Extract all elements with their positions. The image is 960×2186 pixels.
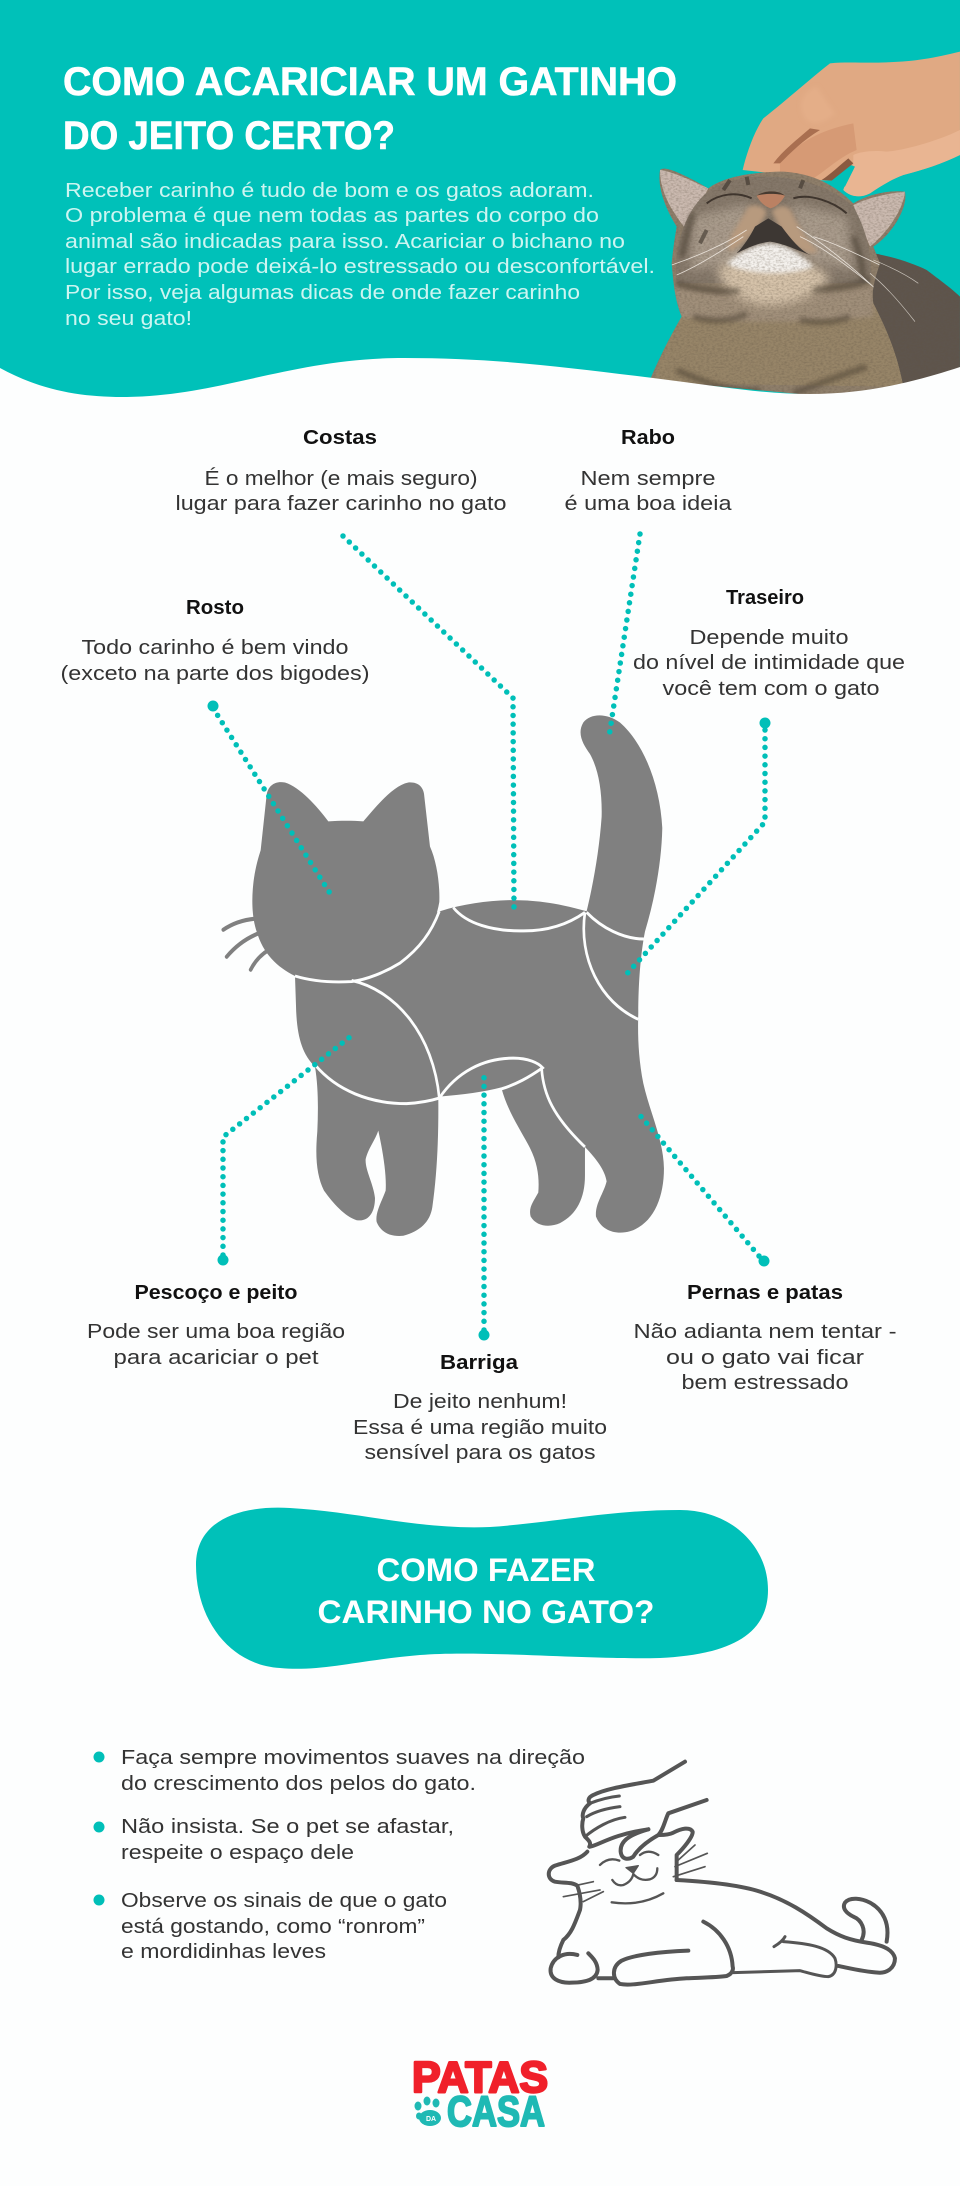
label: barriga: Essa é uma região muito (353, 1417, 607, 1439)
ears inner (660, 170, 905, 247)
whiskers (672, 226, 880, 288)
icon: paw: DA (426, 2116, 436, 2123)
label: pescoco e peito (87, 1282, 345, 1369)
tip 3: Observe os sinais de que o gato (121, 1890, 447, 1912)
label: rosto: Rosto (186, 597, 244, 619)
label: barriga (353, 1352, 607, 1464)
connector: pescoco e peito (223, 1033, 355, 1255)
logo: Patas da Casa (412, 2053, 548, 2136)
label: pernas e patas: bem estressado (682, 1372, 848, 1394)
tip 2: Não insista. Se o pet se afastar, (121, 1816, 454, 1838)
connector: traseiro (623, 730, 765, 978)
header wave edge (0, 358, 960, 425)
label: pernas e patas (634, 1282, 896, 1394)
intro text: Receber carinho é tudo de bom e os gatos adoram. (65, 180, 594, 202)
title: COMO ACARICIAR UM GATINHO (63, 60, 677, 104)
tip list (94, 1747, 585, 1963)
cream bib (717, 256, 830, 305)
callout blob heading: CARINHO NO GATO? (318, 1594, 654, 1630)
label: pernas e patas: Não adianta nem tentar - (634, 1321, 896, 1343)
tip 1: do crescimento dos pelos do gato. (121, 1773, 476, 1795)
tip 2: respeite o espaço dele (121, 1842, 354, 1864)
connector: rabo (609, 534, 640, 737)
label: costas: lugar para fazer carinho no gato (176, 493, 506, 515)
logo: Patas da Casa: CASA (447, 2088, 545, 2136)
whiskers past body (870, 260, 918, 322)
nose (757, 191, 785, 208)
intro text: lugar errado pode deixá-lo estressado ou desconfortável. (65, 256, 655, 278)
label: pescoco e peito: Pode ser uma boa região (87, 1321, 345, 1343)
fur texture (653, 168, 905, 394)
label: traseiro: Traseiro (726, 587, 804, 609)
intro text (65, 180, 655, 330)
label: barriga: sensível para os gatos (364, 1442, 596, 1464)
connector: rosto (213, 708, 333, 898)
label: pescoco e peito: Pescoço e peito (134, 1282, 298, 1304)
label: rosto: (exceto na parte dos bigodes) (60, 663, 370, 685)
intro text: Por isso, veja algumas dicas de onde fazer carinho (65, 282, 580, 304)
label: rabo (564, 427, 733, 515)
label: pernas e patas: Pernas e patas (687, 1282, 843, 1304)
label: rabo: é uma boa ideia (564, 493, 733, 515)
tip 3 (94, 1890, 447, 1963)
label: traseiro: você tem com o gato (662, 678, 880, 700)
label: traseiro: do nível de intimidade que (633, 652, 905, 674)
hand (743, 52, 960, 196)
cat silhouette (223, 715, 664, 1236)
chest fur (653, 303, 903, 387)
photo: hand and cat (640, 52, 960, 403)
tip 2 (94, 1816, 454, 1864)
cat body behind (870, 253, 960, 390)
tip 1: Faça sempre movimentos suaves na direção (121, 1747, 585, 1769)
callout blob heading: COMO FAZER (376, 1552, 596, 1588)
callout blob heading (196, 1508, 768, 1669)
mouth (737, 218, 810, 255)
tip 1 (94, 1747, 585, 1795)
label: rosto (60, 597, 370, 685)
intro text: O problema é que nem todas as partes do corpo do (65, 205, 599, 227)
label: costas (176, 427, 506, 515)
white chin (727, 243, 813, 273)
body (295, 715, 664, 1236)
label: traseiro (633, 587, 905, 700)
connector: costas (343, 536, 514, 911)
face (676, 177, 871, 283)
title (63, 60, 677, 158)
label: barriga: Barriga (440, 1352, 519, 1374)
whiskers (223, 919, 268, 970)
label: pernas e patas: ou o gato vai ficar (666, 1347, 864, 1369)
label: costas: Costas (303, 427, 377, 449)
label: rabo: Rabo (621, 427, 675, 449)
label: pescoco e peito: para acariciar o pet (114, 1347, 319, 1369)
neck band (673, 287, 873, 322)
logo: Patas da Casa: PATAS (412, 2053, 548, 2102)
intro text: animal são indicadas para isso. Acariciar o bichano no (65, 231, 625, 253)
label: traseiro: Depende muito (690, 627, 848, 649)
icon: hand petting cat line drawing (549, 1762, 895, 1985)
label: rosto: Todo carinho é bem vindo (82, 637, 348, 659)
connector: pernas e patas (638, 1113, 759, 1256)
cat head and chest (650, 168, 906, 394)
tip 3: está gostando, como “ronrom” (121, 1916, 425, 1938)
header panel (0, 0, 960, 410)
muzzle sides (729, 205, 818, 253)
tip 3: e mordidinhas leves (121, 1941, 326, 1963)
connector end dots (208, 700, 770, 1340)
intro text: no seu gato! (65, 308, 192, 330)
label: costas: É o melhor (e mais seguro) (204, 467, 478, 490)
title: DO JEITO CERTO? (63, 114, 395, 158)
body part divisions (295, 908, 644, 1147)
head (252, 782, 439, 982)
label: rabo: Nem sempre (580, 468, 716, 490)
connector: barriga (481, 1076, 487, 1330)
stripes (677, 213, 870, 393)
closed eyes (707, 194, 847, 213)
label: barriga: De jeito nenhum! (393, 1391, 567, 1413)
